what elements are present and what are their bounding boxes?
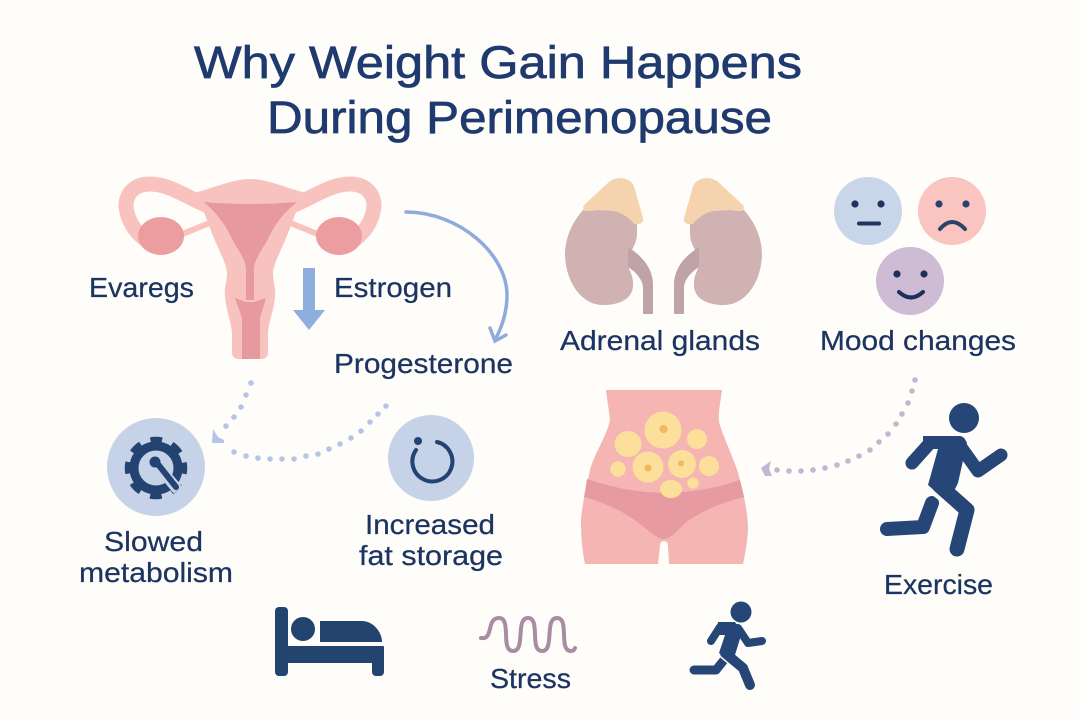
- arrow: curved to progesterone: [406, 212, 507, 341]
- label: Slowed metabolism: metabolism: [79, 557, 233, 588]
- icon: gear and wrench: [107, 418, 205, 516]
- icon: underwear: [584, 479, 744, 539]
- icon: happy face: [876, 247, 944, 315]
- panel: slowed metabolism: [79, 418, 233, 588]
- label: Adrenal glands: Adrenal glands: [560, 325, 760, 356]
- icon: neutral face: [834, 177, 902, 245]
- label: Mood changes: Mood changes: [820, 325, 1016, 356]
- icon: kidneys: [565, 178, 762, 314]
- label: Increased fat storage: Increased: [365, 509, 495, 540]
- label: Progesterone: Progesterone: [334, 348, 513, 379]
- icon: uterus: [126, 179, 374, 359]
- icon: ring: [388, 415, 474, 501]
- panel: reproductive system and hormones: [89, 179, 513, 379]
- label: Increased fat storage: fat storage: [359, 540, 503, 571]
- icon: sad face: [918, 177, 986, 245]
- title: During Perimenopause: [267, 92, 772, 143]
- panel: mood changes: [820, 177, 1016, 356]
- panel: adrenal glands: [560, 178, 762, 356]
- arrow: estrogen decreasing: [293, 268, 325, 330]
- label: Exercise: Exercise: [884, 569, 993, 600]
- icon: fat cells: [610, 412, 719, 498]
- panel: abdominal fat: [581, 390, 748, 564]
- icon: stress wave: [481, 618, 575, 651]
- panel: exercise: [884, 403, 1001, 600]
- icon: small running figure: [694, 602, 762, 685]
- arrow: dotted from exercise to abdomen: [761, 377, 918, 476]
- arrow: dotted from fat storage: [231, 403, 389, 462]
- label: Slowed metabolism: Slowed: [104, 526, 203, 557]
- icon: torso: [581, 390, 748, 564]
- label: Increased fat storage: [359, 509, 503, 571]
- panel: stress: [481, 618, 575, 694]
- label: Estrogen: Estrogen: [334, 272, 452, 303]
- label: Evaregs: Evaregs: [89, 272, 194, 303]
- label: Slowed metabolism: [79, 526, 233, 588]
- panel: increased fat storage: [359, 415, 503, 571]
- title: Why Weight Gain Happens: [194, 37, 802, 88]
- icon: running figure: [887, 403, 1001, 550]
- title: [194, 37, 802, 143]
- label: Stress: Stress: [490, 663, 571, 694]
- arrow: dotted to slowed metabolism: [212, 380, 254, 443]
- icon: sleep bed: [275, 607, 384, 676]
